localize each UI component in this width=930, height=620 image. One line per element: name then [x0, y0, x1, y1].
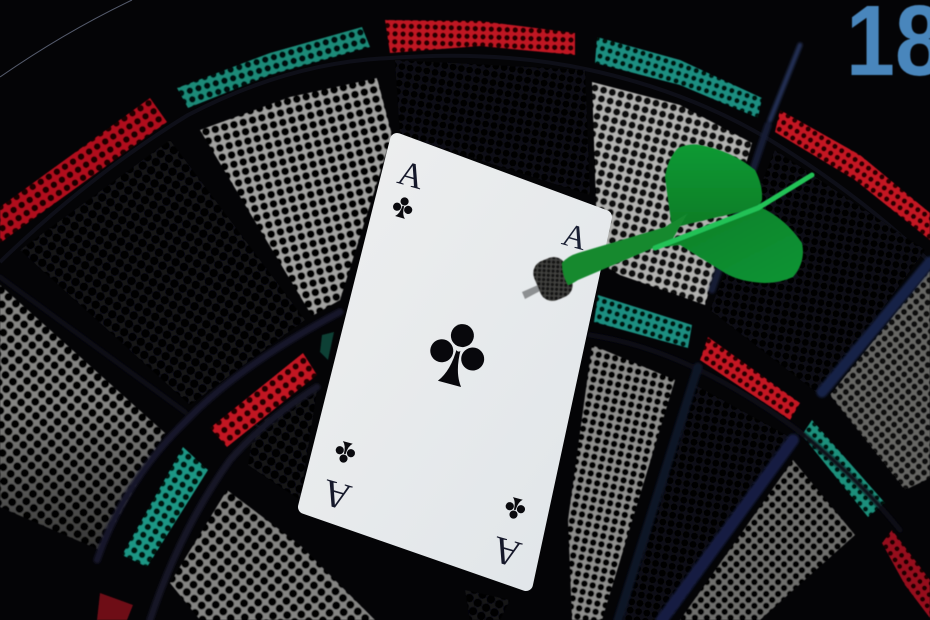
card body: [305, 140, 605, 584]
green barrel: [562, 213, 688, 285]
bright vane edge: [655, 175, 812, 248]
top left index A: A: [394, 153, 429, 197]
bottom right club: [503, 496, 527, 521]
lower flight: [655, 207, 803, 283]
playing card: ace of clubs: [305, 140, 605, 584]
bottom left index A: A: [317, 470, 356, 519]
top left club: [391, 195, 415, 220]
knurled grip: [529, 253, 577, 305]
outer rim arcs: [0, 0, 930, 262]
center club: [423, 317, 492, 391]
green dart: [522, 144, 812, 305]
upper flight: [665, 144, 762, 228]
top right index A: A: [558, 217, 591, 258]
dart steel tip: [522, 285, 540, 299]
bottom left club: [333, 440, 357, 465]
bottom right index A: A: [487, 527, 526, 576]
